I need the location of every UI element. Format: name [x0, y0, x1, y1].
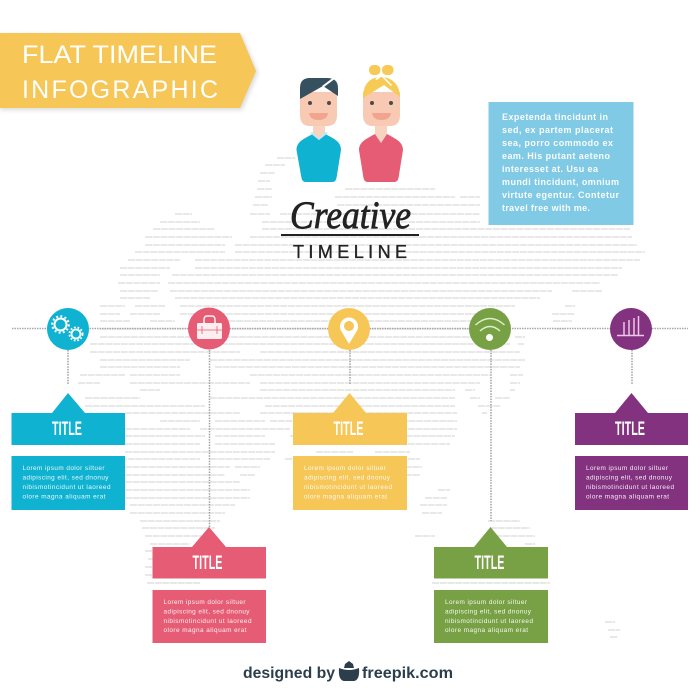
info text box: sed, ex partem placerat — [502, 125, 613, 135]
card: pink: olore magna aliquam erat — [164, 627, 247, 634]
title banner — [0, 33, 258, 110]
icon: bar chart — [610, 308, 652, 350]
creative timeline heading: TIMELINE — [293, 242, 407, 262]
card: pink: TITLE — [192, 553, 222, 574]
title banner: FLAT TIMELINE — [22, 41, 217, 69]
card: green: olore magna aliquam erat — [445, 627, 528, 634]
info text box: virtute egentur. Contetur — [502, 190, 619, 200]
card: purple: nibismotincidunt ut laoreed — [586, 484, 674, 491]
card: green — [434, 527, 548, 643]
icon: wifi — [469, 308, 511, 350]
icon: briefcase — [188, 308, 230, 350]
man character — [296, 77, 341, 182]
card: cyan: olore magna aliquam erat — [22, 494, 106, 500]
creative timeline heading — [281, 194, 419, 262]
info text box: interesset at. Usu ea — [502, 164, 599, 174]
card: cyan: adipiscing elit, sed dnonuy — [22, 474, 109, 482]
card: purple: Lorem ipsum dolor siltuer — [586, 465, 669, 472]
info text box: travel free with me. — [502, 203, 590, 213]
card: green: adipiscing elit, sed dnonuy — [445, 608, 532, 616]
icon: gears — [47, 308, 89, 350]
background dotted world map — [78, 158, 645, 637]
timeline dotted line — [12, 328, 688, 528]
card: green: TITLE — [474, 553, 504, 574]
info text box — [488, 102, 634, 225]
card: green: nibismotincidunt ut laoreed — [445, 618, 533, 625]
woman character — [359, 65, 403, 182]
card: yellow: nibismotincidunt ut laoreed — [304, 484, 392, 491]
footer credit — [243, 661, 453, 682]
card: cyan: TITLE — [52, 419, 82, 440]
footer credit: designed by — [243, 665, 335, 682]
creative timeline heading: Creative — [290, 194, 411, 237]
card: yellow: olore magna aliquam erat — [304, 494, 387, 500]
card: yellow: adipiscing elit, sed dnonuy — [304, 474, 391, 482]
card: purple: olore magna aliquam erat — [586, 494, 669, 500]
card: yellow: TITLE — [334, 419, 364, 440]
card: cyan: nibismotincidunt ut laoreed — [22, 484, 111, 491]
info text box: eam. His putant aeteno — [502, 151, 610, 161]
card: purple: adipiscing elit, sed dnonuy — [586, 474, 673, 482]
card: purple — [575, 393, 688, 510]
card: purple: TITLE — [615, 419, 645, 440]
info text box: sea, porro commodo ex — [502, 138, 613, 148]
info text box: mundi tincidunt, omnium — [502, 177, 619, 187]
card: yellow: Lorem ipsum dolor siltuer — [304, 465, 387, 472]
card: cyan — [12, 393, 125, 510]
card: pink: Lorem ipsum dolor siltuer — [164, 599, 246, 606]
card: green: Lorem ipsum dolor siltuer — [445, 599, 528, 606]
title banner: INFOGRAPHIC — [22, 76, 218, 104]
card: yellow — [293, 393, 407, 510]
card: pink: adipiscing elit, sed dnonuy — [164, 608, 250, 616]
info text box: Expetenda tincidunt in — [502, 112, 608, 122]
card: cyan: Lorem ipsum dolor siltuer — [22, 465, 105, 472]
icon: location pin — [328, 308, 370, 350]
card: pink: nibismotincidunt ut laoreed — [164, 618, 252, 625]
footer credit: freepik.com — [362, 665, 453, 682]
card: pink — [152, 527, 266, 643]
